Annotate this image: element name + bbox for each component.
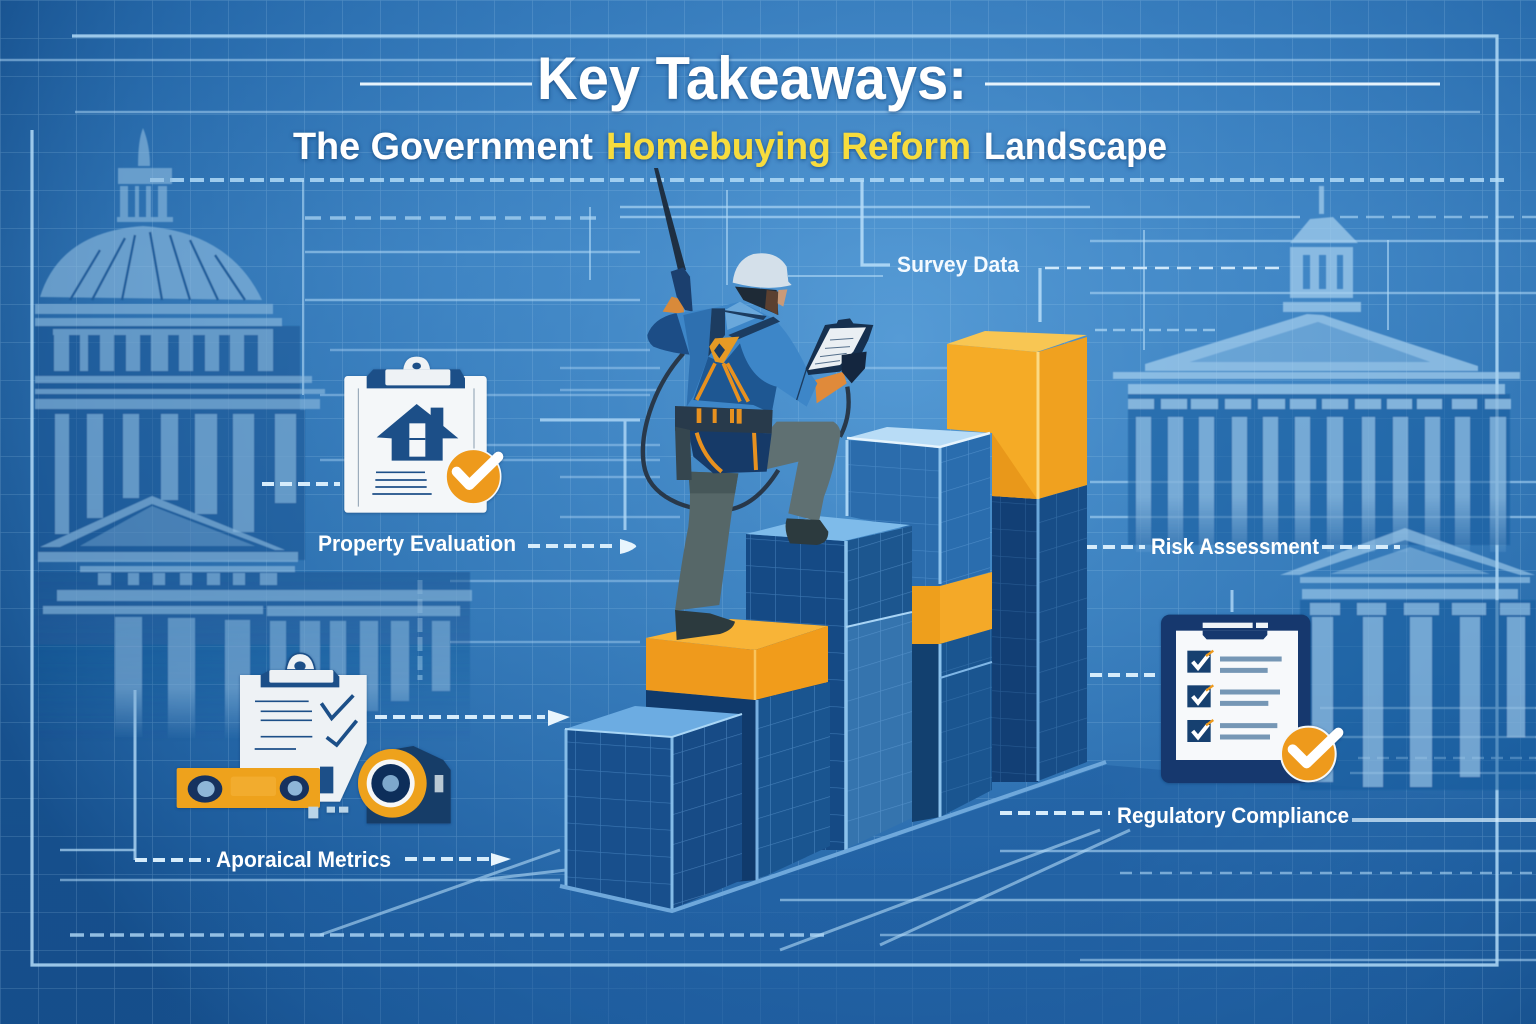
lower pediment and columns: [1280, 528, 1535, 787]
subtitle: Homebuying Reform: [606, 126, 971, 168]
harness ring: [709, 337, 739, 363]
upper colonnade: [35, 304, 325, 534]
lantern and dome: [40, 128, 262, 300]
main colonnade: [1136, 417, 1506, 552]
tool belt: [675, 406, 773, 433]
arrow: appraisal metrics checklist: [375, 710, 570, 726]
front leg: [763, 422, 840, 522]
label: appraisal metrics: Aporaical Metrics: [216, 847, 391, 872]
strap inner shade: [797, 368, 807, 400]
icon: appraisal checklist, level and tape: [177, 653, 451, 823]
subtitle: [293, 126, 1167, 168]
shirt shaded panel: [683, 308, 712, 407]
hand: [663, 297, 684, 314]
ring center: [714, 343, 725, 358]
pediment: [38, 496, 472, 616]
brown hair: [765, 290, 778, 315]
bar 5: tallest, orange top: [947, 331, 1087, 782]
checklist rows: [1187, 651, 1282, 742]
hard hat: [733, 253, 792, 288]
title: Key Takeaways:: [537, 45, 967, 112]
belt pouch: [675, 427, 692, 480]
bar 3: blue step: [746, 516, 912, 850]
subtitle: Landscape: [984, 126, 1167, 168]
icon: property evaluation clipboard: [344, 357, 501, 513]
collar: [725, 302, 763, 330]
right government building silhouette: [1113, 186, 1536, 790]
hips: [688, 430, 772, 473]
leg shading: [688, 472, 738, 493]
floor plane: [150, 765, 1500, 1024]
hip strap: [697, 432, 756, 472]
lower building shadow backing: [35, 572, 470, 742]
clipboard: [806, 318, 873, 375]
safety rope: [643, 353, 849, 510]
title lines: [360, 82, 1440, 86]
bar 4: mid blue with orange band: [847, 427, 992, 822]
belt stripes: [697, 408, 742, 424]
forearm: [815, 372, 847, 403]
worker upper body: [647, 253, 873, 480]
paper lines: [815, 338, 853, 364]
icon: regulatory compliance clipboard: [1161, 615, 1338, 783]
shirt: [677, 302, 817, 413]
face: [778, 289, 787, 307]
device grip: [671, 267, 693, 312]
bar 1: front step: [565, 706, 742, 909]
lower colonnade: [115, 617, 450, 740]
left government building silhouette: [35, 128, 472, 742]
label: risk assessment: Risk Assessment: [1151, 534, 1319, 559]
subtitle: The Government: [293, 126, 593, 168]
dome ribs: [70, 232, 245, 300]
icon: measuring pole: [654, 168, 686, 270]
upper building shadow backing: [35, 326, 305, 560]
harness straps: [697, 363, 748, 402]
connector: risk and compliance lines: [1000, 547, 1536, 820]
label connector arrows: [135, 484, 1536, 866]
clipboard paper: [808, 327, 866, 370]
bar base line: [560, 762, 1106, 911]
harness strap: [708, 308, 780, 357]
worker lower body: [643, 353, 849, 640]
lantern: [1283, 186, 1361, 312]
label: property evaluation: Property Evaluation: [318, 531, 516, 556]
right building shadow backing: [1128, 394, 1536, 790]
shirt back between straps: [693, 343, 777, 413]
label: survey data: Survey Data: [897, 252, 1020, 277]
raised arm: [647, 313, 700, 355]
bar 2: orange step: [646, 619, 830, 890]
rear leg: [675, 472, 738, 611]
main pediment: [1113, 314, 1520, 409]
arrow: property evaluation: [262, 484, 636, 554]
arrow: appraisal metrics label: [135, 853, 511, 866]
neck and hair: [735, 287, 778, 315]
glove: [842, 352, 867, 383]
boots: [675, 518, 828, 640]
chart: stepped bars: [560, 331, 1106, 911]
label: regulatory compliance: Regulatory Compliance: [1117, 803, 1349, 828]
